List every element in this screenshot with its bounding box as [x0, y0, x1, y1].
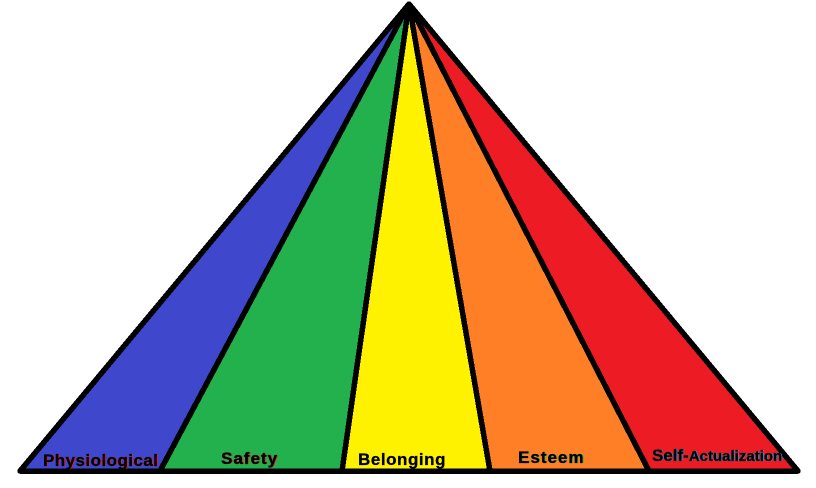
label: Esteem: Esteem: [518, 448, 584, 467]
label: Safety: Safety: [221, 449, 278, 468]
segment: belonging (yellow): [342, 4, 490, 471]
segment: physiological (blue): [20, 4, 409, 471]
label: Physiological: Physiological: [43, 451, 158, 470]
segment: esteem (orange): [409, 4, 649, 471]
label: Belonging: Belonging: [358, 450, 446, 469]
segment: safety (green): [160, 4, 409, 471]
segment: self-actualization (red): [409, 4, 798, 471]
label: Self-Actualization: Self-Actualization: [652, 446, 782, 465]
